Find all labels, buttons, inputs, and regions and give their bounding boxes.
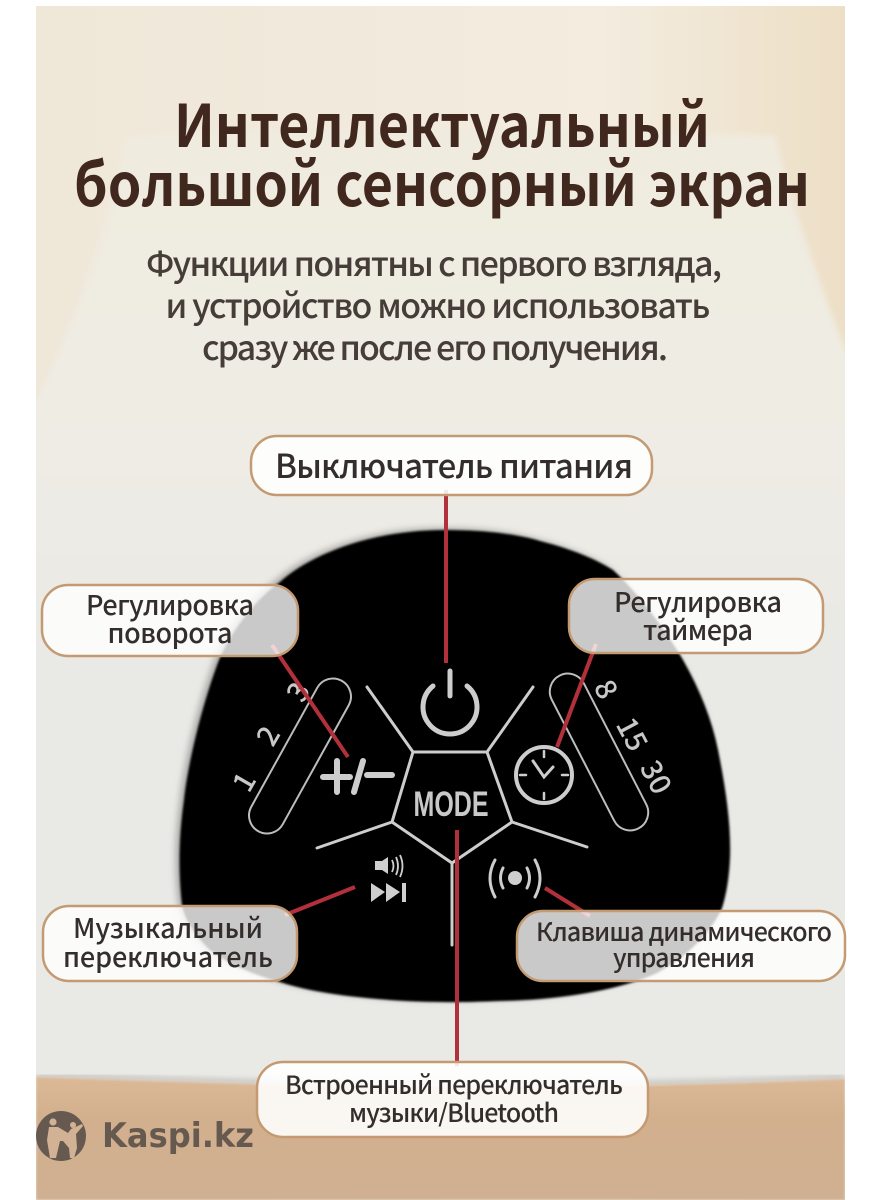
- callout: music: переключатель: [63, 936, 273, 975]
- device base: [36, 1075, 845, 1200]
- callout: dynamic: управления: [613, 939, 755, 975]
- watermark: Kaspi.kz: [102, 1116, 254, 1156]
- callout: timer: Регулировка: [614, 581, 782, 620]
- icon: clock: [516, 747, 572, 803]
- callout: timer: [569, 579, 823, 653]
- callout: timer: таймера: [643, 609, 753, 648]
- rotation scale: [220, 672, 357, 840]
- callout: bluetooth: Встроенный переключатель: [285, 1066, 623, 1102]
- callout: rotation: поворота: [108, 612, 232, 651]
- callout: bluetooth: музыки/Bluetooth: [349, 1094, 559, 1130]
- icon: plus minus: [323, 761, 392, 792]
- connector lines: [272, 490, 596, 1066]
- subtitle: сразу же после его получения.: [202, 321, 668, 370]
- callout: dynamic: [517, 911, 845, 981]
- subtitle: [146, 237, 722, 370]
- callout: music: [43, 906, 297, 981]
- rotation scale: 2: [244, 717, 289, 753]
- timer scale: 30: [631, 752, 684, 801]
- icon: power: [423, 671, 477, 734]
- rotation scale: 3: [274, 673, 319, 709]
- touch panel: [176, 528, 730, 1002]
- callout: power: Выключатель питания: [275, 440, 633, 488]
- watermark: [36, 1111, 254, 1161]
- subtitle: Функции понятны с первого взгляда,: [146, 237, 722, 286]
- timer scale: 15: [607, 709, 660, 758]
- callout: bluetooth: [257, 1062, 648, 1137]
- icon: music and next: [371, 855, 406, 902]
- subtitle: и устройство можно использовать: [166, 279, 710, 328]
- timer scale: 8: [585, 671, 630, 706]
- callout: rotation: [42, 584, 298, 656]
- timer scale: [544, 667, 684, 837]
- title: Интеллектуальный: [174, 79, 710, 164]
- device body: [30, 129, 850, 1100]
- title: большой сенсорный экран: [74, 138, 810, 223]
- mode label: MODE: [414, 785, 488, 824]
- callout: dynamic: Клавиша динамического: [536, 913, 832, 949]
- icon: dynamic: [490, 860, 540, 897]
- rotation scale: 1: [220, 763, 265, 799]
- callout: music: Музыкальный: [73, 907, 263, 946]
- title: [74, 79, 810, 223]
- panel dividers: [317, 687, 587, 945]
- callout: rotation: Регулировка: [86, 584, 254, 623]
